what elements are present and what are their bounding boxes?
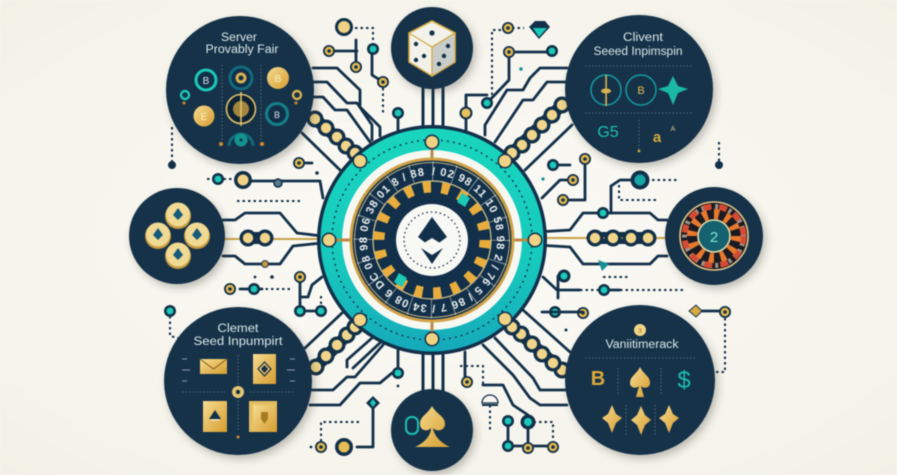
client icons: A [671, 126, 676, 133]
heading: seed input: Seeed Inpimspin [594, 46, 682, 58]
panel: gold coins left [129, 188, 225, 284]
icon: small dome [482, 395, 498, 406]
circuit traces: bottom right [460, 310, 570, 448]
circuit traces: top right [466, 28, 719, 213]
panel: server provably fair [166, 16, 314, 164]
coin icons [181, 65, 301, 146]
heading: seed input: Seed Inpumpirt [194, 336, 283, 348]
panel: vanitimerack bottom right [565, 305, 715, 455]
gold stars [602, 405, 679, 435]
suit icons: B [591, 368, 605, 390]
panel: client seed bottom left [164, 307, 312, 455]
coin icons: B [203, 76, 210, 87]
heading: provably fair: Provably Fair [206, 44, 279, 56]
coin icons [145, 202, 210, 269]
suit icons: $ [677, 367, 691, 394]
heading: clivent: Clivent [623, 32, 664, 44]
mini roulette wheel: 2 [710, 229, 718, 246]
panel: dice [391, 7, 473, 89]
circuit nodes: top right [460, 22, 723, 206]
circuit nodes: bottom left [310, 367, 404, 456]
client icons: B [637, 85, 645, 97]
panel: spade bottom [391, 389, 473, 471]
circuit traces: bottom left [305, 313, 398, 447]
icon: gold token [634, 324, 646, 336]
bead chains [225, 96, 667, 378]
coin icons: B [275, 74, 282, 85]
icon: gold spade [415, 406, 450, 447]
circuit nodes: top left [168, 18, 404, 189]
central roulette wheel [316, 124, 548, 356]
connectors: dice and spade stems [423, 85, 443, 395]
client icons: a [653, 129, 662, 146]
icon: ethereum diamond [418, 217, 447, 264]
circuit nodes: left [164, 261, 327, 317]
circuit traces: right [537, 213, 683, 298]
icon: gold token: 3 [638, 328, 642, 335]
card icons [182, 354, 295, 438]
circuit traces: left [170, 213, 322, 338]
suit icons [585, 358, 697, 397]
circuit traces: top left [172, 28, 398, 201]
trace: right side links [542, 305, 731, 372]
icon: teal coin [406, 417, 418, 434]
heading: vanitimerack: Vaniitimerack [606, 339, 679, 351]
circuit nodes: bottom right [461, 376, 559, 454]
coin icons: E [201, 112, 208, 123]
panel: mini roulette right [665, 187, 763, 285]
icon: dice [409, 21, 455, 76]
icon: teal gem [529, 21, 550, 39]
client icons [585, 66, 693, 152]
heading: clemet: Clemet [218, 323, 259, 335]
heading: server: Server [221, 32, 257, 44]
wheel number band: / 02 98 11 10 58 98 2 / 76 5 / 86 7 / 34 08 6 DC 08 98 06 38 01 8 / 88 [358, 166, 506, 314]
circuit nodes: right [549, 207, 610, 332]
panel: client seed top right [565, 15, 713, 163]
client icons: G5 [597, 124, 619, 141]
coin icons: B [274, 110, 280, 120]
